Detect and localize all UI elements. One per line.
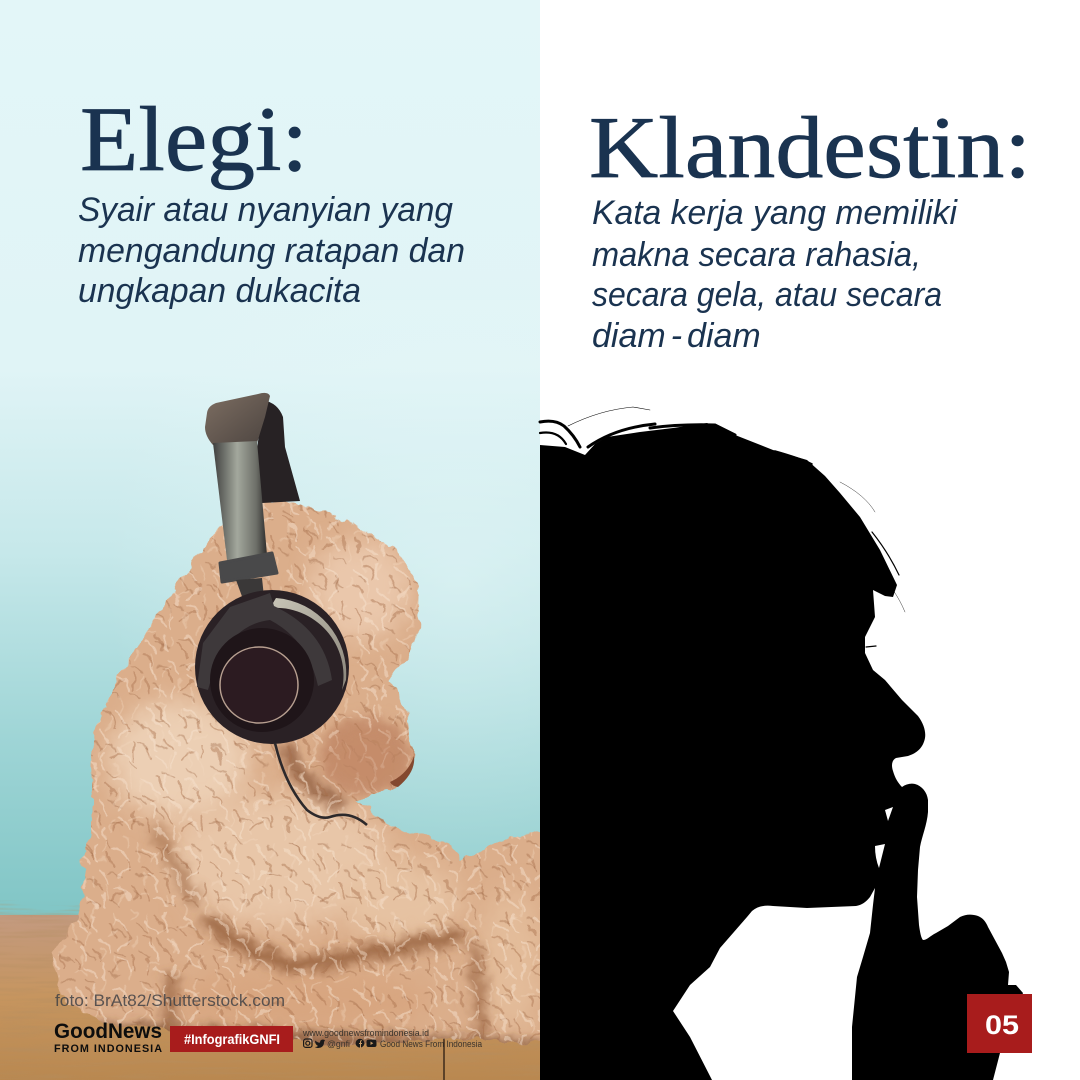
- icon: twitter: [315, 1040, 325, 1048]
- hashtag badge: [170, 1026, 293, 1052]
- top band: [205, 393, 270, 445]
- text block: Klandestin definition: secara gela, atau secara: [592, 276, 942, 314]
- logo: GoodNews From Indonesia: FROM INDONESIA: [54, 1043, 162, 1055]
- silhouette: person with finger on lips: [540, 407, 1023, 1080]
- hair wisps: [540, 407, 905, 647]
- panel: right silhouette: [540, 0, 1080, 1080]
- rear strap: [257, 400, 300, 503]
- logo: GoodNews From Indonesia: GoodNews: [54, 1020, 162, 1043]
- lip highlights: [875, 807, 893, 868]
- stem: [236, 578, 264, 596]
- icon: youtube: [366, 1040, 376, 1047]
- icon: instagram: [304, 1039, 312, 1047]
- bear body, head and fur: [52, 502, 540, 1046]
- bear nose: [390, 756, 414, 787]
- text block: Klandestin definition: [592, 194, 958, 355]
- sliding arm: [213, 441, 267, 560]
- panel: left teddy bear photo: [0, 0, 560, 1080]
- ear cup: [195, 590, 349, 744]
- teddy bear: [52, 502, 540, 1046]
- page number badge: [967, 994, 1032, 1053]
- text block: Elegi definition: mengandung ratapan dan: [78, 232, 465, 270]
- website and social links: Good News From Indonesia: [380, 1039, 482, 1049]
- website and social links: www.goodnewsfromindonesia.id: [302, 1027, 429, 1038]
- text block: Elegi definition: [78, 191, 465, 310]
- text block: Klandestin definition: makna secara rahasia,: [592, 236, 921, 274]
- photo credit: foto: BrAt82/Shutterstock.com: [55, 992, 285, 1010]
- text block: Elegi definition: Syair atau nyanyian yang: [78, 191, 453, 229]
- heading: Elegi: Elegi:: [80, 88, 308, 190]
- text block: Klandestin definition: Kata kerja yang memiliki: [592, 194, 958, 232]
- photo background: teal wall: [0, 0, 540, 920]
- wooden table: [0, 915, 540, 1080]
- heading: Klandestin: Klandestin:: [589, 100, 1031, 197]
- icon: facebook: [356, 1039, 364, 1048]
- hinge: [220, 553, 277, 582]
- headphones: [195, 393, 367, 825]
- hashtag badge: #InfografikGNFI: [184, 1032, 280, 1047]
- website and social links: [303, 1030, 482, 1049]
- page number badge: 05: [985, 1010, 1019, 1040]
- text block: Klandestin definition: diam-diam: [592, 317, 761, 355]
- logo: GoodNews From Indonesia: [54, 1022, 162, 1052]
- text block: Elegi definition: ungkapan dukacita: [78, 272, 361, 310]
- website and social links: @gnfi: [327, 1039, 350, 1049]
- cable: [275, 743, 367, 825]
